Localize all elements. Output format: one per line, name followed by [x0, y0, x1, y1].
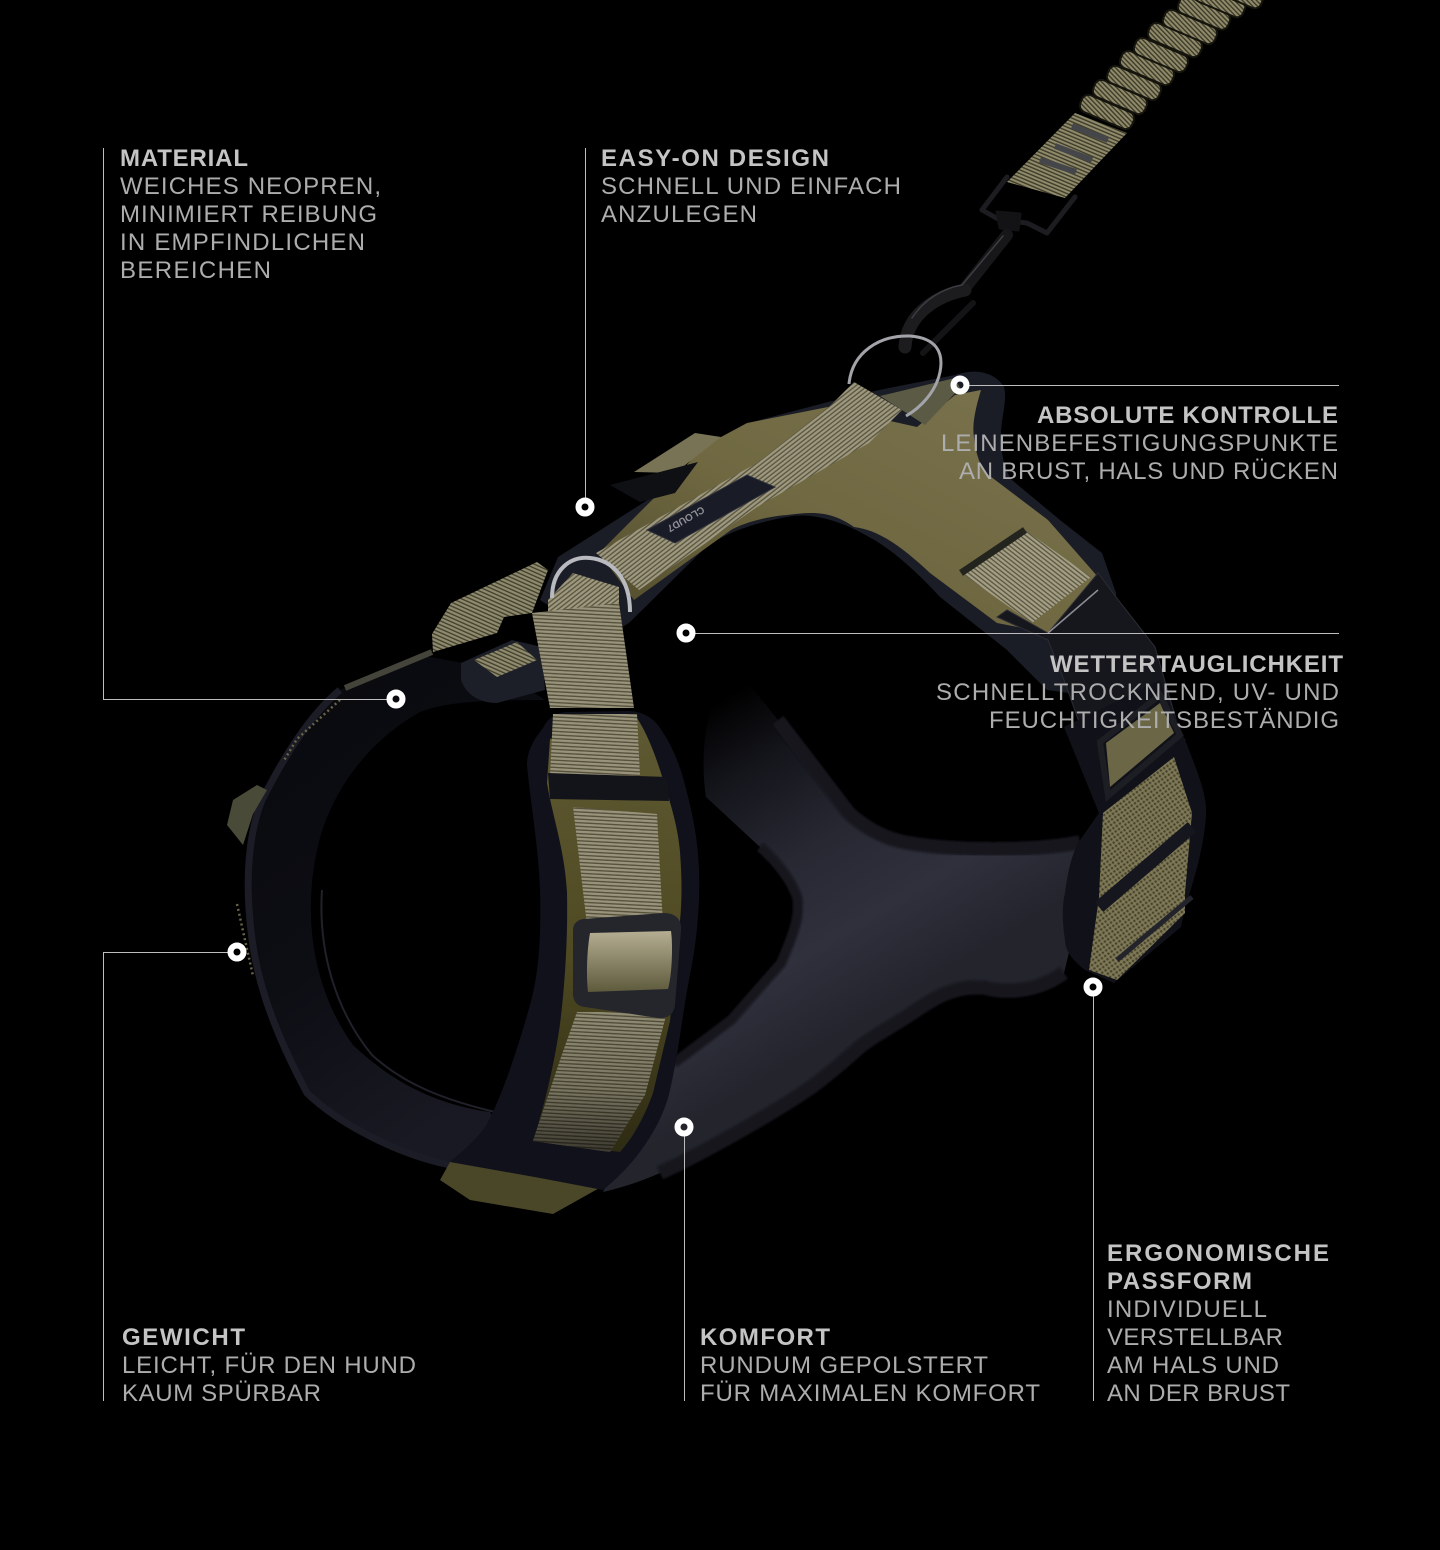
- left webbing tab: [432, 562, 548, 652]
- heading: EASY-ON DESIGN: [601, 145, 829, 172]
- callout: gewicht: [104, 946, 416, 1407]
- upper webbing: [550, 714, 640, 776]
- body text: AM HALS UND: [1107, 1352, 1279, 1379]
- strap binding: [450, 711, 699, 1190]
- body text: BEREICHEN: [120, 257, 271, 284]
- leader line: [695, 632, 1339, 634]
- marker dot: [678, 1120, 690, 1134]
- body text: SCHNELL UND EINFACH: [601, 173, 901, 200]
- marker dot: [680, 626, 692, 640]
- body text: SCHNELLTROCKNEND, UV- UND: [936, 679, 1339, 706]
- leader line: [104, 952, 228, 1401]
- body text: MINIMIERT REIBUNG: [120, 201, 377, 228]
- body text: [936, 679, 1339, 734]
- callout: absolute kontrolle: [941, 378, 1339, 485]
- upper loop tab: [634, 433, 721, 473]
- heading: ERGONOMISCHE: [1107, 1240, 1329, 1267]
- body text: FÜR MAXIMALEN KOMFORT: [700, 1380, 1040, 1407]
- top mesh by D-ring: [880, 378, 960, 425]
- heading: PASSFORM: [1107, 1268, 1252, 1295]
- callout: material: [104, 145, 402, 706]
- brand label text: CLOUD7: [665, 503, 706, 534]
- black cross strap: [1099, 827, 1192, 907]
- leader line: [969, 384, 1339, 386]
- callout: komfort: [678, 1120, 1040, 1407]
- olive neoprene: [599, 390, 1098, 633]
- callout: ergonomische passform: [1086, 980, 1329, 1407]
- leash bungee section: [1078, 0, 1265, 131]
- ring webbing loop: [548, 573, 619, 618]
- heading: ABSOLUTE KONTROLLE: [1037, 402, 1338, 429]
- body text: INDIVIDUELL: [1107, 1296, 1267, 1323]
- front strap: [450, 711, 699, 1190]
- body text: FEUCHTIGKEITSBESTÄNDIG: [989, 707, 1339, 734]
- body text: [120, 173, 381, 284]
- marker dot: [1086, 980, 1100, 994]
- body text: ANZULEGEN: [601, 201, 757, 228]
- lower tab edge: [1117, 897, 1192, 960]
- leader line: [104, 148, 387, 700]
- side tab on neck loop: [227, 785, 267, 845]
- heading: GEWICHT: [122, 1324, 245, 1351]
- body text: [1107, 1296, 1290, 1407]
- weave panel: [1089, 757, 1192, 980]
- leash end tab: [1007, 113, 1127, 198]
- body text: [122, 1352, 416, 1407]
- neck pad: [461, 640, 545, 703]
- strap shading: [533, 1012, 667, 1152]
- front loop strap: [532, 603, 634, 708]
- body text: AN DER BRUST: [1107, 1380, 1290, 1407]
- back D-ring: [849, 336, 941, 416]
- body text: RUNDUM GEPOLSTERT: [700, 1352, 988, 1379]
- body text: LEINENBEFESTIGUNGSPUNKTE: [941, 430, 1338, 457]
- body text: KAUM SPÜRBAR: [122, 1380, 321, 1407]
- plastic slider: [573, 913, 681, 1018]
- panel binding: [540, 372, 1120, 700]
- webbing edge of neck loop: [345, 652, 432, 688]
- olive padding: [533, 718, 682, 1152]
- tab keeper: [610, 462, 698, 502]
- front D-ring: [552, 558, 630, 612]
- carabiner snap hook: [905, 177, 1075, 353]
- adjuster webbing: [1106, 703, 1174, 787]
- brand patch: [647, 475, 775, 543]
- right side strap: [1063, 680, 1206, 983]
- middle webbing: [573, 807, 663, 925]
- slider webbing: [587, 931, 672, 992]
- back panel: [540, 372, 1120, 700]
- heading: WETTERTAUGLICHKEIT: [1050, 651, 1343, 678]
- leader line: [1092, 996, 1094, 1401]
- stitching on neck loop: [237, 700, 340, 976]
- chest plate: [603, 680, 1080, 1192]
- harness product illustration: [227, 0, 1265, 1214]
- side release buckle: [997, 573, 1185, 797]
- body text: VERSTELLBAR: [1107, 1324, 1283, 1351]
- leader line: [684, 1136, 686, 1401]
- upper right webbing strap: [961, 530, 1091, 623]
- lower webbing: [533, 1012, 667, 1152]
- pad webbing: [474, 642, 537, 677]
- body text: IN EMPFINDLICHEN: [120, 229, 365, 256]
- marker dot: [390, 692, 402, 706]
- back webbing band: [596, 382, 902, 590]
- body text: AN BRUST, HALS UND RÜCKEN: [959, 458, 1338, 485]
- callout: easy-on design: [578, 145, 901, 514]
- body text: [700, 1352, 1040, 1407]
- marker dot: [230, 946, 244, 958]
- leader line: [584, 148, 586, 498]
- heading: [1107, 1240, 1329, 1295]
- marker dot: [954, 378, 966, 392]
- body text: WEICHES NEOPREN,: [120, 173, 381, 200]
- bottom olive chest section: [440, 1145, 625, 1214]
- marker dot: [578, 500, 592, 514]
- callout: wettertauglichkeit: [680, 626, 1343, 734]
- body text: [601, 173, 901, 228]
- heading: MATERIAL: [120, 145, 248, 172]
- adjuster frame: [1100, 695, 1180, 796]
- black elastic keeper: [548, 773, 669, 801]
- body text: [941, 430, 1338, 485]
- left neck loop: [227, 652, 545, 1172]
- heading: KOMFORT: [700, 1324, 830, 1351]
- body text: LEICHT, FÜR DEN HUND: [122, 1352, 416, 1379]
